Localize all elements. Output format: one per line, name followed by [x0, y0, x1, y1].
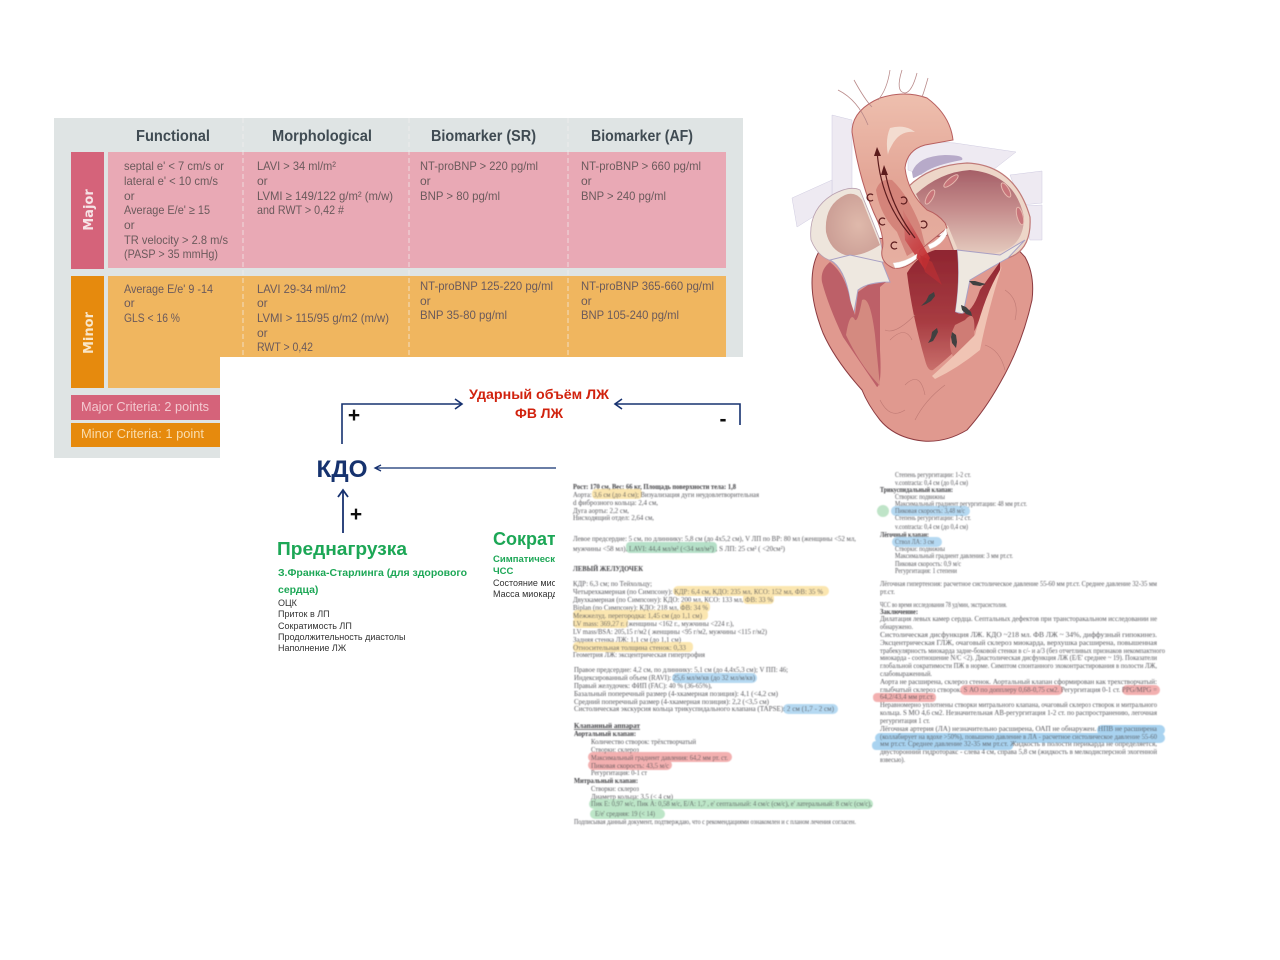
- block: preload: Сократимость ЛП: [278, 621, 352, 631]
- report text: right heart: Базальный поперечный размер (4-хкамерная позиция): 4,1 (<4,2 см): [574, 690, 779, 698]
- illustration: heart with aortic stenosis: [792, 70, 1042, 441]
- report text: left ventricle: Межжелуд. перегородка: 1,45 см (до 1,1 см): [573, 612, 703, 620]
- major row text: or: [420, 174, 431, 188]
- report text: valves: Регургитация: 0-1 ст: [591, 769, 647, 777]
- sign: plus top: +: [348, 404, 360, 427]
- block: preload: ОЦК: [278, 598, 298, 608]
- block: preload: Преднагрузка: [277, 539, 408, 559]
- block: preload: сердца): [278, 584, 318, 596]
- legend: minor criteria points: [71, 423, 221, 447]
- report text: tricuspid and pulmonary valves: Регургитация: 1 степени: [895, 567, 957, 575]
- sign: minus: -: [720, 408, 726, 431]
- report text: aorta and left atrium: мужчины <58 мл), LAVI: 44,4 мл/м² (<34 мл/м²) , S ЛП: 25 см² ( <20см²): [573, 545, 786, 553]
- report text: right heart: Средний поперечный размер (4-хкамерная позиция): 2,2 (<3,5 см): [574, 698, 770, 706]
- report text: left ventricle: КДР: 6,3 см; по Тейхольцу;: [573, 580, 652, 588]
- arrow: afterload minus to stroke volume: [615, 399, 740, 425]
- left atrium: [908, 163, 1030, 268]
- block: preload: Наполнение ЛЖ: [278, 643, 347, 653]
- major row text: Average E/e' ≥ 15: [124, 203, 210, 217]
- report text: conclusion: взвесью).: [880, 756, 905, 764]
- legend: minor criteria points: Minor Criteria: 1 point: [81, 427, 205, 441]
- report text: conclusion: двусторонний гидроторакс - слева 4 см, справа 5,8 см (жидкость в мелкодисперсной эхогенной: [880, 748, 1157, 756]
- report text: aorta and left atrium: Нисходящий отдел: 2,64 см,: [573, 514, 654, 522]
- report text: valves: Количество створок: трёхстворчатый: [591, 738, 696, 746]
- report text: tricuspid and pulmonary valves: Ствол ЛА: 3 см: [895, 538, 934, 546]
- report text: left ventricle: LV mass/BSA: 205,15 г/м2 ( женщины <95 г/м2, мужчины <115 г/м2): [573, 628, 768, 636]
- block: contractility, cut off: [493, 532, 555, 599]
- report text: aorta and left atrium: d фиброзного кольца: 2,4 см,: [573, 499, 658, 507]
- report text: valves: Клапанный аппарат: [574, 722, 641, 730]
- block: preload: Продолжительность диастолы: [278, 632, 405, 642]
- report text: conclusion: глобальной сократимости ПЖ в норме. Симптом спонтанного эхоконтрастирования в полости ЛЖ,: [880, 662, 1157, 670]
- heading: stroke volume and ejection fraction: Ударный объём ЛЖ: [469, 387, 610, 402]
- arrow: contractility to КДО: [375, 465, 556, 471]
- row: Major: [71, 152, 726, 269]
- panel: white flow diagram background: [220, 357, 750, 467]
- row: Minor: Minor: [82, 311, 97, 354]
- major row text: NT-proBNP > 220 pg/ml: [420, 159, 538, 173]
- report text: conclusion: [880, 608, 1165, 764]
- report text: conclusion: Эксцентрическая ГЛЖ, очаговый склероз миокарда, верхушка расширена, повышенная: [880, 639, 1158, 647]
- label: КДО: КДО: [316, 456, 368, 483]
- major row text: BNP > 80 pg/ml: [420, 189, 500, 203]
- report text: conclusion: мм рт.ст. Среднее давление 32-35 мм рт.ст. Жидкость в полости перикарда не определяется,: [880, 740, 1157, 748]
- right ventricle cavity: [822, 262, 886, 387]
- report text: conclusion: 64,2/43,4 мм рт.ст.: [880, 693, 934, 701]
- report text: pulmonary hypertension: ЧСС во время исследования 78 уд/мин, экстрасистолия.: [880, 601, 1007, 609]
- report text: conclusion: регургитация 1 ст.: [880, 717, 930, 725]
- report text: aorta and left atrium: Аорта: 3,6 см (до 4 см); Визуализация дуги неудовлетворительная: [573, 491, 760, 499]
- row: Minor: [71, 276, 726, 388]
- report text: right heart: [574, 666, 835, 713]
- report text: left ventricle: Двухкамерная (по Симпсону): КДО: 200 мл, КСО: 133 мл, ФВ: 33 %: [573, 596, 773, 604]
- block: contractility, cut off: Масса миокарда: [493, 589, 563, 599]
- report text: conclusion: кольца. S МО 4,6 см2. Незначительная АВ-регургитация 1-2 ст. по распространению, легочная: [880, 709, 1158, 717]
- report text: aorta and left atrium: Дуга аорты: 2,2 см,: [573, 507, 629, 515]
- report text: tricuspid and pulmonary valves: Трикуспидальный клапан:: [880, 486, 953, 494]
- major row text: LAVI > 34 ml/m²: [257, 159, 336, 173]
- report text: tricuspid and pulmonary valves: [880, 471, 1027, 575]
- legend: major criteria points: [71, 395, 221, 420]
- report text: valves: Пиковая скорость: 43,5 м/с: [591, 762, 669, 770]
- minor row text: GLS < 16 %: [124, 311, 180, 325]
- report text: pulmonary hypertension: [880, 580, 1158, 609]
- table column headings: Biomarker (SR): [431, 128, 536, 145]
- major row text: or: [124, 189, 135, 203]
- report text: conclusion: трабекулярность миокарда задне-боковой стенки в с/- и а/3 (без отчетливых признаков некомпактного: [880, 647, 1165, 655]
- legend: major criteria points: Major Criteria: 2 points: [81, 400, 209, 414]
- minor row text: NT-proBNP 125-220 pg/ml: [420, 279, 553, 293]
- block: contractility, cut off: Симпатическая: [493, 554, 566, 565]
- report text: conclusion: Дилатация левых камер сердца. Септальных дефектов при трансторакальном исследовании не: [880, 615, 1157, 623]
- report text: pulmonary hypertension: рт.ст.: [880, 588, 895, 596]
- report text: pulmonary hypertension: Лёгочная гипертензия: расчетное систолическое давление 55-60 мм рт.ст. Среднее давление 32-35 мм: [880, 580, 1158, 588]
- report text: valves: Створки: склероз: [591, 785, 639, 793]
- report text: left ventricle: [573, 565, 823, 659]
- report text: conclusion: Систолическая дисфункция ЛЖ. КДО ~218 мл. ФВ ЛЖ ~ 34%, диффузный гипокинез.: [880, 631, 1157, 639]
- block: preload: З.Франка-Старлинга (для здорового: [278, 567, 467, 579]
- report text: tricuspid and pulmonary valves: Максимальный градиент регургитации: 48 мм рт.ст.: [895, 500, 1027, 508]
- major row text: or: [124, 218, 135, 232]
- major row text: BNP > 240 pg/ml: [581, 189, 666, 203]
- minor row text: [124, 279, 714, 354]
- heart outer body: [812, 230, 1033, 441]
- block: contractility, cut off: ЧСС: [493, 566, 514, 577]
- myocardium fibres: [880, 290, 1016, 420]
- flow arrows: [867, 150, 927, 249]
- report text: conclusion: Лёгочная артерия (ЛА) незначительно расширена, ОАП не обнаружен. НПВ не расширена: [880, 725, 1158, 733]
- report text: left ventricle: LV mass: 369,27 г. (женщины <162 г., мужчины <224 г.),: [573, 620, 734, 628]
- report text: tricuspid and pulmonary valves: Степень регургитации: 1-2 ст.: [895, 514, 971, 522]
- minor row text: or: [581, 294, 592, 308]
- panel: echo report page 1: [573, 483, 873, 826]
- report text: valves: Диаметр кольца: 3,5 (< 4 см): [591, 793, 674, 801]
- pulmonary vein ostia: [923, 173, 1025, 225]
- report text: conclusion: (коллабирует на вдохе >50%), повышено давление в ЛА - расчетное систолическое давление 55-60: [880, 733, 1157, 741]
- right atrium: [811, 188, 885, 262]
- report text: tricuspid and pulmonary valves: v.contracta: 0,4 см (до 0,4 см): [895, 523, 969, 531]
- block: contractility, cut off: Сократимость: [493, 529, 621, 549]
- table column headings: [136, 128, 693, 145]
- major row text: NT-proBNP > 660 pg/ml: [581, 159, 701, 173]
- minor row text: NT-proBNP 365-660 pg/ml: [581, 279, 714, 293]
- arrow: preload to КДО: [338, 490, 348, 533]
- minor row text: BNP 105-240 pg/ml: [581, 308, 679, 322]
- report text: valves: [574, 722, 872, 826]
- report text: left ventricle: Относительная толщина стенок: 0,33: [573, 644, 686, 652]
- major row text: or: [257, 174, 268, 188]
- minor row text: BNP 35-80 pg/ml: [420, 308, 507, 322]
- report text: conclusion: Неравномерно уплотнены створки митрального клапана, очаговый склероз створок и митрального: [880, 701, 1157, 709]
- minor row text: Average E/e' 9 -14: [124, 282, 213, 296]
- report text: tricuspid and pulmonary valves: Створки: подвижны: [895, 545, 945, 553]
- major row text: or: [581, 174, 592, 188]
- report text: valves: Максимальный градиент давления: 64,2 мм рт. ст.: [591, 754, 728, 762]
- row: Major: Major: [82, 189, 97, 231]
- heading: stroke volume and ejection fraction: ФВ ЛЖ: [515, 406, 564, 421]
- sign: plus lower: +: [350, 503, 362, 526]
- aorta: [852, 94, 953, 268]
- block: preload: [277, 539, 467, 653]
- major row text: lateral e' < 10 cm/s: [124, 174, 218, 188]
- heading: stroke volume and ejection fraction: [469, 387, 610, 421]
- panel: stroke volume flow diagram: [277, 387, 740, 653]
- ventricular wall arrows: [921, 281, 986, 348]
- table column headings: Biomarker (AF): [591, 128, 693, 145]
- arrow: КДО to stroke volume: [342, 399, 462, 444]
- report text: tricuspid and pulmonary valves: Пиковая скорость: 3,48 м/с: [895, 507, 965, 515]
- panel: echo report page 2: [872, 471, 1165, 764]
- block: contractility, cut off: Состояние миокарда: [493, 578, 581, 588]
- report text: tricuspid and pulmonary valves: v.contracta: 0,4 см (до 0,4 см): [895, 479, 969, 487]
- report text: left ventricle: ЛЕВЫЙ ЖЕЛУДОЧЕК: [573, 565, 644, 573]
- minor row text: RWT > 0,42: [257, 340, 313, 354]
- report text: tricuspid and pulmonary valves: Максимальный градиент давления: 3 мм рт.ст.: [895, 552, 1013, 560]
- report text: conclusion: миокарда - соотношение N/C <2). Диастолическая дисфункция ЛЖ (E/E' среднее ~ 19). Показатели: [880, 654, 1157, 662]
- report text: conclusion: Заключение:: [880, 608, 918, 616]
- report text: valves: Створки: склероз: [591, 746, 639, 754]
- minor row text: LAVI 29-34 ml/m2: [257, 282, 346, 296]
- report text: tricuspid and pulmonary valves: Лёгочный клапан:: [880, 531, 929, 539]
- report text: valves: Митральный клапан:: [574, 777, 638, 785]
- supra-aortic vessel lines: [838, 70, 928, 125]
- report text: left ventricle: Biplan (по Симпсону): КДО: 218 мл, ФВ: 34 %: [573, 604, 708, 612]
- major row text: [124, 159, 701, 261]
- minor row text: or: [257, 326, 268, 340]
- report text: conclusion: Аорта не расширена, склероз стенок. Аортальный клапан сформирован как трехстворчатый:: [880, 678, 1157, 686]
- report text: right heart: Индексированный объем (RAVI): 25,6 мл/м/кв (до 32 мл/м/кв): [574, 674, 756, 682]
- report highlights: [872, 505, 1165, 750]
- block: preload: Приток в ЛП: [278, 609, 330, 619]
- regurgitant jet: [903, 210, 930, 270]
- report text: valves: Пик E: 0,97 м/с, Пик A: 0,58 м/с, E/A: 1,7 , e' септальный: 4 см/с (см/с), e' латеральный: 8 см/с (см/с),: [591, 800, 872, 808]
- report text: aorta and left atrium: [573, 483, 856, 553]
- table column headings: Functional: [136, 128, 210, 145]
- report text: right heart: Систолическая экскурсия кольца трикуспидального клапана (TAPSE): 2 см (1,7 - 2 см): [574, 705, 835, 713]
- major row text: and RWT > 0,42 #: [257, 203, 344, 217]
- major row text: (PASP > 35 mmHg): [124, 247, 218, 261]
- report text: aorta and left atrium: Левое предсердие: 5 см, по длиннику: 5,8 см (до 4х5,2 см), V ЛП по ВР: 80 мл (женщины <52 мл,: [573, 535, 856, 543]
- report text: left ventricle: Геометрия ЛЖ: эксцентрическая гипертрофия: [573, 651, 706, 659]
- major row text: LVMI ≥ 149/122 g/m² (m/w): [257, 189, 393, 203]
- report text: valves: Подписывая данный документ, подтверждаю, что с рекомендациями ознакомлен и с планом лечения согласен.: [574, 818, 856, 826]
- report text: conclusion: глыбчатый склероз створок. S АО по допплеру 0,68-0,75 см2. Регургитация 0-1 ст. PPG/MPG =: [880, 686, 1157, 694]
- report text: aorta and left atrium: Рост: 170 см, Вес: 66 кг, Площадь поверхности тела: 1,8: [573, 483, 736, 491]
- report text: left ventricle: Задняя стенка ЛЖ: 1,1 см (до 1,1 см): [573, 636, 682, 644]
- left ventricle cavity: [907, 250, 1000, 370]
- minor row text: LVMI > 115/95 g/m2 (m/w): [257, 311, 389, 325]
- pale vessels: [792, 115, 1042, 240]
- report text: tricuspid and pulmonary valves: Створки: подвижны: [895, 493, 945, 501]
- table column headings: Morphological: [272, 128, 372, 145]
- minor row text: or: [124, 296, 135, 310]
- report text: valves: E/e' средняя: 19 (< 14): [595, 810, 656, 818]
- valve leaflets (mitral and tricuspid): [955, 240, 1025, 314]
- aortic valve leaflets: [893, 228, 947, 268]
- report text: right heart: Правое предсердие: 4,2 см, по длиннику: 5,1 см (до 4,4х5,3 см); V ПП: 46;: [574, 666, 788, 674]
- panel: HFA-PEFF criteria table: [54, 118, 743, 458]
- report text: tricuspid and pulmonary valves: Пиковая скорость: 0,9 м/с: [895, 560, 961, 568]
- major row text: septal e' < 7 cm/s or: [124, 159, 224, 173]
- minor row text: or: [420, 294, 431, 308]
- major row text: TR velocity > 2.8 m/s: [124, 233, 228, 247]
- report text: left ventricle: Четырехкамерная (по Симпсону): КДР: 6,4 см, КДО: 235 мл, КСО: 152 мл, ФВ: 35 %: [573, 588, 823, 596]
- minor row text: or: [257, 296, 268, 310]
- report highlights: [573, 489, 873, 819]
- report text: valves: Аортальный клапан:: [574, 730, 636, 738]
- report text: right heart: Правый желудочек: ФИП (FAC): 40 % (36-65%),: [574, 682, 712, 690]
- report text: conclusion: слабовыраженный.: [880, 670, 932, 678]
- report text: tricuspid and pulmonary valves: Степень регургитации: 1-2 ст.: [895, 471, 971, 479]
- report text: conclusion: обнаружено.: [880, 623, 913, 631]
